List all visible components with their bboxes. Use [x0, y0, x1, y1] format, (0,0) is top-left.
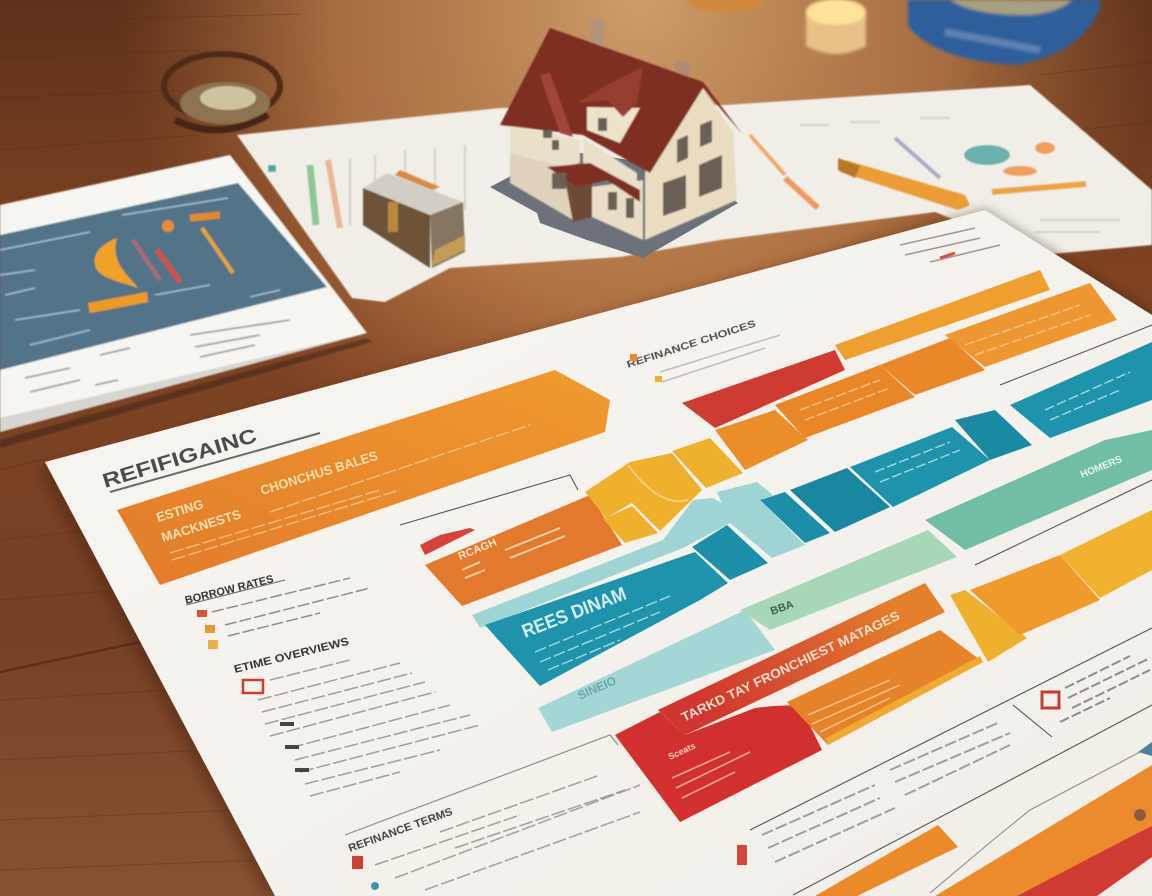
lower text block with arrow	[737, 742, 1152, 865]
panel: orange lower blocks	[787, 510, 1152, 745]
panel: orange header: CHONCHUS BALES	[258, 448, 380, 498]
ribbon: light teal strip	[472, 498, 745, 628]
back paper with charts	[237, 85, 1152, 302]
panel: red long block	[658, 583, 945, 735]
panel: orange header: ESTING	[154, 496, 205, 525]
lower right text block	[890, 656, 1150, 795]
dark chart panel	[0, 183, 327, 370]
panel: teal small block	[692, 525, 768, 580]
panel: yellow folded ribbon	[585, 438, 743, 543]
panel: dark orange block: RCAGH	[457, 537, 499, 563]
blue bowl	[908, 0, 1100, 65]
left text block: section one	[184, 573, 370, 649]
left text block: section two: ETIME OVERVIEWS	[233, 636, 350, 676]
main paper	[38, 208, 1152, 896]
candle	[806, 0, 866, 54]
panel: teal large block: REES DINAM	[519, 584, 629, 643]
upper heading: REFINANCE CHOICES	[626, 319, 758, 371]
connector lines	[400, 325, 1152, 895]
panel: orange header: MACKNESTS	[159, 506, 243, 545]
panel: green band: BBA	[769, 598, 795, 618]
panel: orange header	[117, 370, 610, 585]
magnifier ring	[164, 54, 280, 130]
panel: teal chevrons	[717, 342, 1152, 558]
pen	[838, 158, 970, 210]
panel: dark orange block	[420, 495, 622, 606]
panel: red block	[615, 705, 822, 822]
bottom orange and red bands	[815, 765, 1152, 896]
amber object at the top edge	[687, 0, 763, 12]
arrow	[1138, 742, 1152, 756]
panel: red block: Sceats	[667, 740, 697, 762]
bottom left text block: REFINANCE TERMS	[347, 806, 454, 855]
panel: red long block: TARKD TAY FRONCHIEST MATAGES	[679, 608, 902, 725]
left paper with dark chart panel	[0, 155, 372, 448]
bottom left text block	[345, 735, 640, 890]
left text block: section two	[233, 636, 480, 796]
document title	[100, 425, 320, 493]
left text block: section one: BORROW RATES	[184, 573, 275, 607]
panel: upper red and orange blocks	[682, 270, 1117, 470]
model house	[500, 18, 743, 240]
panel: teal large block	[485, 552, 728, 686]
panel: light teal lower: SINEIO	[576, 673, 618, 703]
document title: REFIFIGAINC	[100, 425, 259, 493]
top right text	[900, 228, 1000, 262]
small chest	[363, 170, 465, 268]
small house base	[490, 150, 738, 258]
panel: green band: HOMERS	[1079, 454, 1124, 481]
panel: light teal lower	[538, 610, 775, 732]
panel: green band	[740, 430, 1152, 630]
upper heading	[626, 319, 780, 382]
